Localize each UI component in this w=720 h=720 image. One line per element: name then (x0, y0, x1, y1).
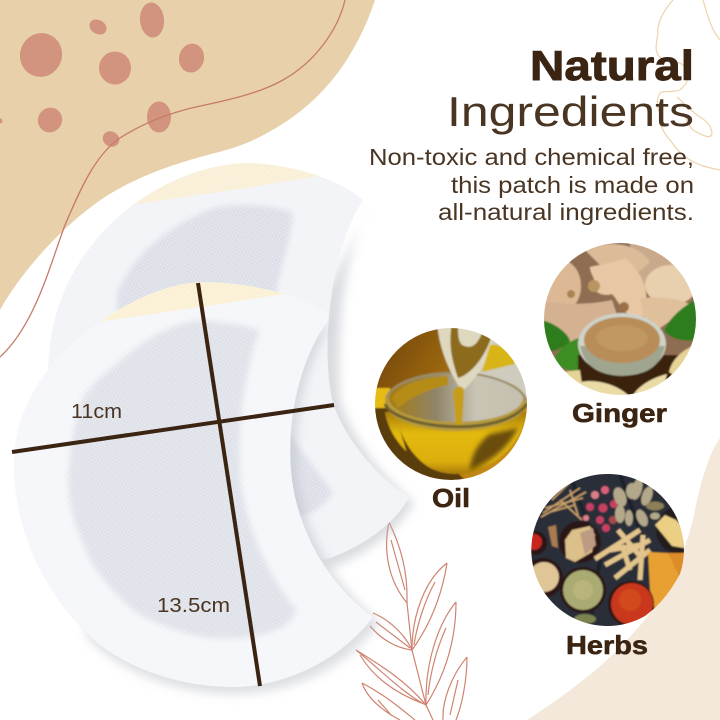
label: 11cm: 11cm (71, 401, 122, 423)
herbs bowl: green flowers (560, 567, 606, 613)
ginger slices and dark base (578, 355, 678, 397)
herbs bowl: red berries (531, 530, 548, 556)
decorative curved line (0, 0, 345, 357)
rear patch body (48, 163, 409, 560)
decorative outline: top right (656, 0, 720, 170)
description text: all-natural ingredients. (438, 199, 694, 225)
front patch pad (68, 320, 297, 639)
background blob: bottom-right cream (527, 438, 720, 720)
ginger roots (546, 262, 582, 304)
herbs dried pods (611, 477, 664, 528)
label: Ginger: Ginger (572, 398, 667, 428)
herbs bowl: ginger pieces (656, 508, 684, 554)
sprig stem (407, 603, 433, 720)
herbs leaf scrap (574, 614, 596, 624)
ingredient photo: oil (375, 328, 527, 480)
ginger bowl of powder (578, 313, 666, 375)
leaf 3 (370, 613, 412, 650)
ingredient photo: ginger (544, 243, 696, 395)
description text: this patch is made on (451, 172, 694, 198)
rear patch shadow (300, 206, 414, 568)
patch: rear (40, 158, 420, 570)
oil backdrop (376, 329, 527, 479)
ginger leaves (540, 320, 570, 352)
heading line: Ingredients: Ingredients (447, 88, 694, 135)
herbs orange slices (648, 552, 682, 610)
leaf 5 (356, 650, 426, 705)
rear patch backing strip (132, 163, 319, 206)
oil bowl (385, 412, 527, 474)
measurement cross lines (12, 283, 334, 686)
background blob: top-left beige (0, 0, 375, 310)
patch: front (10, 280, 380, 694)
front patch backing strip (98, 281, 292, 322)
leaf 6 (443, 657, 467, 720)
herbs bowl: pale chips (532, 558, 564, 598)
leaf 1 (387, 522, 407, 603)
heading line: Natural: Natural (530, 42, 694, 89)
herbs ginseng strips (595, 530, 650, 580)
ingredient photo: herbs (531, 474, 684, 626)
description text (369, 144, 694, 225)
label: Herbs: Herbs (566, 630, 648, 660)
herbs loose root (548, 525, 558, 548)
leaf 2 (412, 563, 447, 650)
leaf 4 (426, 602, 456, 705)
herbs bowl: saffron (608, 581, 654, 627)
front patch shadow (86, 322, 380, 694)
herbs rosebuds (583, 486, 618, 532)
oil jug and stream (436, 328, 492, 390)
leaf 7 (362, 683, 415, 720)
heading (447, 42, 694, 135)
ginger backdrop (551, 243, 694, 372)
description text: Non-toxic and chemical free, (369, 144, 694, 170)
front patch body (14, 282, 373, 687)
botanical sprig (356, 522, 467, 720)
label: Oil: Oil (432, 483, 470, 513)
label: 13.5cm: 13.5cm (157, 595, 230, 617)
decorative dots (0, 2, 207, 150)
herbs dried roots (541, 482, 586, 520)
herbs dark table (532, 474, 674, 626)
herbs bowl: sliced root (559, 521, 601, 563)
rear patch pad (117, 205, 333, 517)
